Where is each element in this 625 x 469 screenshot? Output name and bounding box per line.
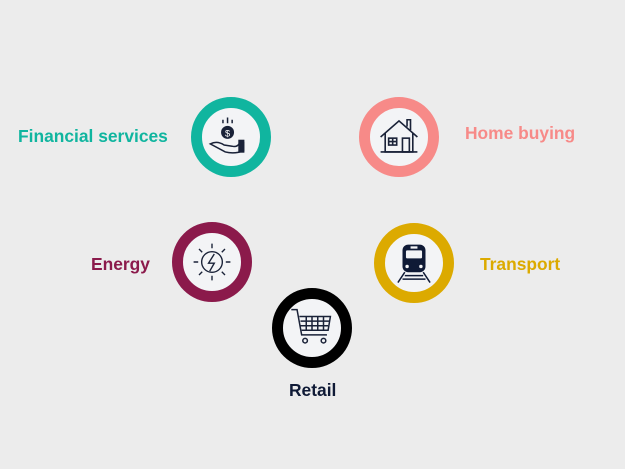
circle: home buying — [359, 97, 439, 177]
label: transport: Transport — [480, 254, 560, 274]
icon: train — [397, 244, 431, 283]
circle: energy — [172, 222, 252, 302]
label: home buying: Home buying — [465, 123, 575, 143]
icon: shopping cart — [291, 308, 332, 344]
circle: financial services — [191, 97, 271, 177]
label: retail: Retail — [289, 380, 336, 400]
icon: sun with bolt — [194, 244, 230, 280]
circle: retail — [272, 288, 352, 368]
icon: house — [380, 119, 418, 153]
circle: transport — [374, 223, 454, 303]
icon: hand with coin — [208, 118, 244, 154]
icon: hand with coin: $ — [225, 128, 230, 138]
label: energy: Energy — [91, 254, 150, 274]
label: financial services: Financial services — [18, 126, 168, 146]
